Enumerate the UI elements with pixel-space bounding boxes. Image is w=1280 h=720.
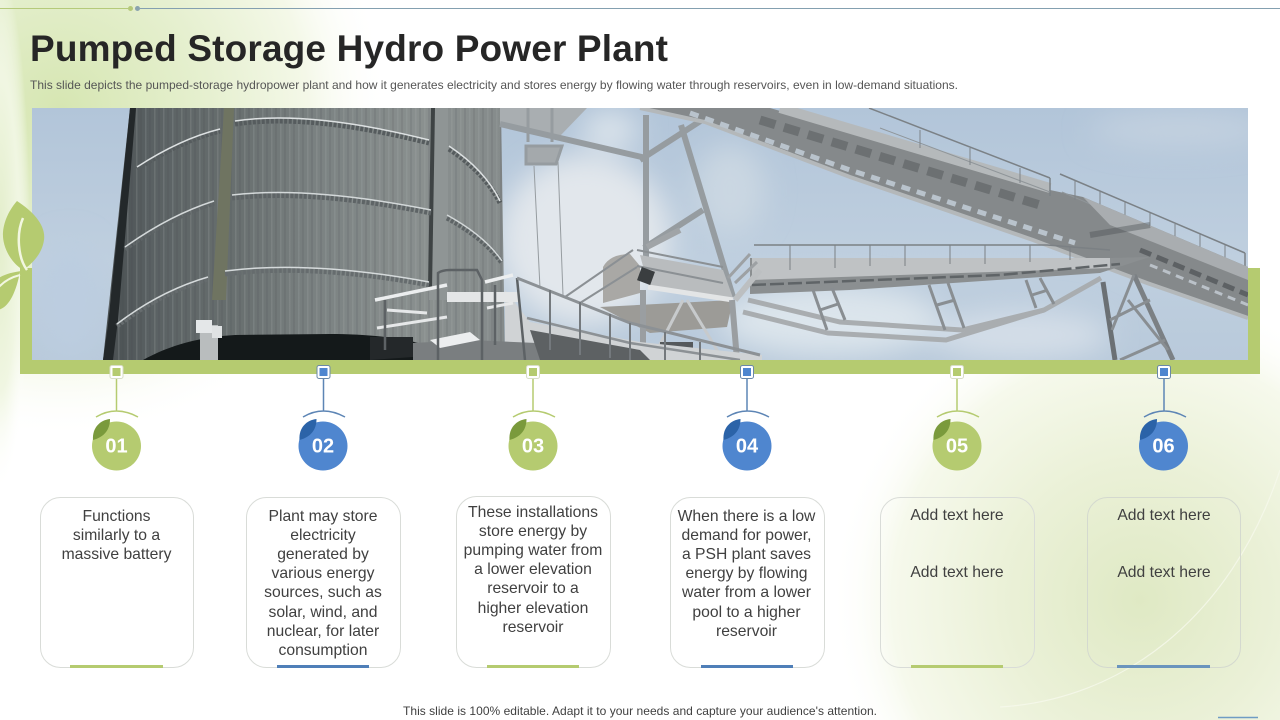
panel: card 06: Add text here: [1117, 507, 1211, 524]
panel: card 01: similarly to a: [73, 527, 160, 544]
badge 01: 01: [105, 436, 128, 458]
panel: card 02: [246, 498, 400, 668]
step 06 connector: [1139, 366, 1188, 470]
panel: card 03: pumping water from: [464, 542, 602, 559]
main conveyor: [640, 108, 1248, 318]
panel: card 02: nuclear, for later: [267, 623, 379, 640]
handle 04: [740, 366, 754, 378]
title: Pumped Storage Hydro Power Plant: [30, 28, 668, 69]
panel: card 04: reservoir: [716, 623, 777, 640]
sky: [32, 108, 1270, 360]
panel: card 02: consumption: [279, 642, 367, 659]
badge 02: 02: [312, 436, 334, 458]
second conveyor: [750, 245, 1150, 294]
handle 05: [950, 366, 964, 378]
panel: card 02: Plant may store: [268, 508, 378, 525]
panel: card 03: higher elevation: [478, 600, 588, 617]
panel: card 01: massive battery: [62, 546, 172, 563]
handle 01: [110, 366, 123, 378]
panel: card 02: electricity: [290, 527, 356, 544]
panel: card 02: solar, wind, and: [268, 604, 378, 621]
panel: card 04: water from a lower: [681, 584, 811, 601]
step 02 connector: [298, 366, 348, 470]
panel: card 04: a PSH plant saves: [682, 546, 811, 563]
corner page mark: [1218, 716, 1258, 718]
panel: card 05: Add text here: [910, 507, 1004, 524]
green frame behind photo: [20, 268, 1260, 374]
panel: card 04: When there is a low: [678, 508, 816, 525]
photo: pumped storage plant: [32, 108, 1270, 360]
tank: [103, 108, 505, 360]
panel: card 03: reservoir to a: [487, 580, 579, 597]
handle 02: [317, 366, 330, 378]
snowy stairway: [370, 270, 762, 360]
panel: card 04: pool to a higher: [692, 604, 801, 621]
panel: card 02: various energy: [272, 565, 375, 582]
supports and braces: [743, 275, 1173, 360]
panel: card 05: Add text here: [910, 564, 1004, 581]
panel: card 03: These installations: [468, 504, 598, 521]
panel: card 01: Functions: [82, 508, 151, 525]
badge 06: 06: [1152, 436, 1175, 458]
handle 06: [1158, 366, 1170, 378]
subtitle: This slide depicts the pumped-storage hydropower plant and how it generates electricity and stores energy by flowing water through reservoirs, even in low-demand situations.: [30, 78, 958, 92]
icon: leaves: [0, 201, 44, 310]
panel: card 06: Add text here: [1117, 564, 1211, 581]
step 05 connector: [932, 366, 982, 470]
panel: card 01: [40, 498, 194, 668]
upper left steel frame: [500, 108, 733, 297]
panel: card 03: reservoir: [502, 619, 564, 636]
panel: card 03: store energy by: [479, 523, 587, 540]
panel: card 05: [880, 498, 1034, 668]
footer note: This slide is 100% editable. Adapt it to your needs and capture your audience's attention.: [403, 704, 877, 718]
handle 03: [526, 366, 540, 378]
top rule with dots: [0, 6, 1280, 11]
panel: card 02: generated by: [277, 546, 369, 563]
panel: card 02: sources, such as: [264, 584, 382, 601]
step 03 connector: [508, 366, 558, 470]
panel: card 04: energy by flowing: [685, 565, 808, 582]
panel: card 04: [670, 498, 824, 668]
step 04 connector: [722, 366, 772, 470]
badge 04: 04: [736, 436, 759, 458]
panel: card 03: [456, 496, 610, 668]
central equipment: [565, 230, 760, 360]
badge 05: 05: [946, 436, 968, 458]
step 01 connector: [92, 366, 141, 470]
panel: card 03: a lower elevation: [474, 561, 592, 578]
panel: card 04: demand for power,: [682, 527, 811, 544]
panel: card 06: [1088, 498, 1240, 668]
badge 03: 03: [522, 436, 544, 458]
